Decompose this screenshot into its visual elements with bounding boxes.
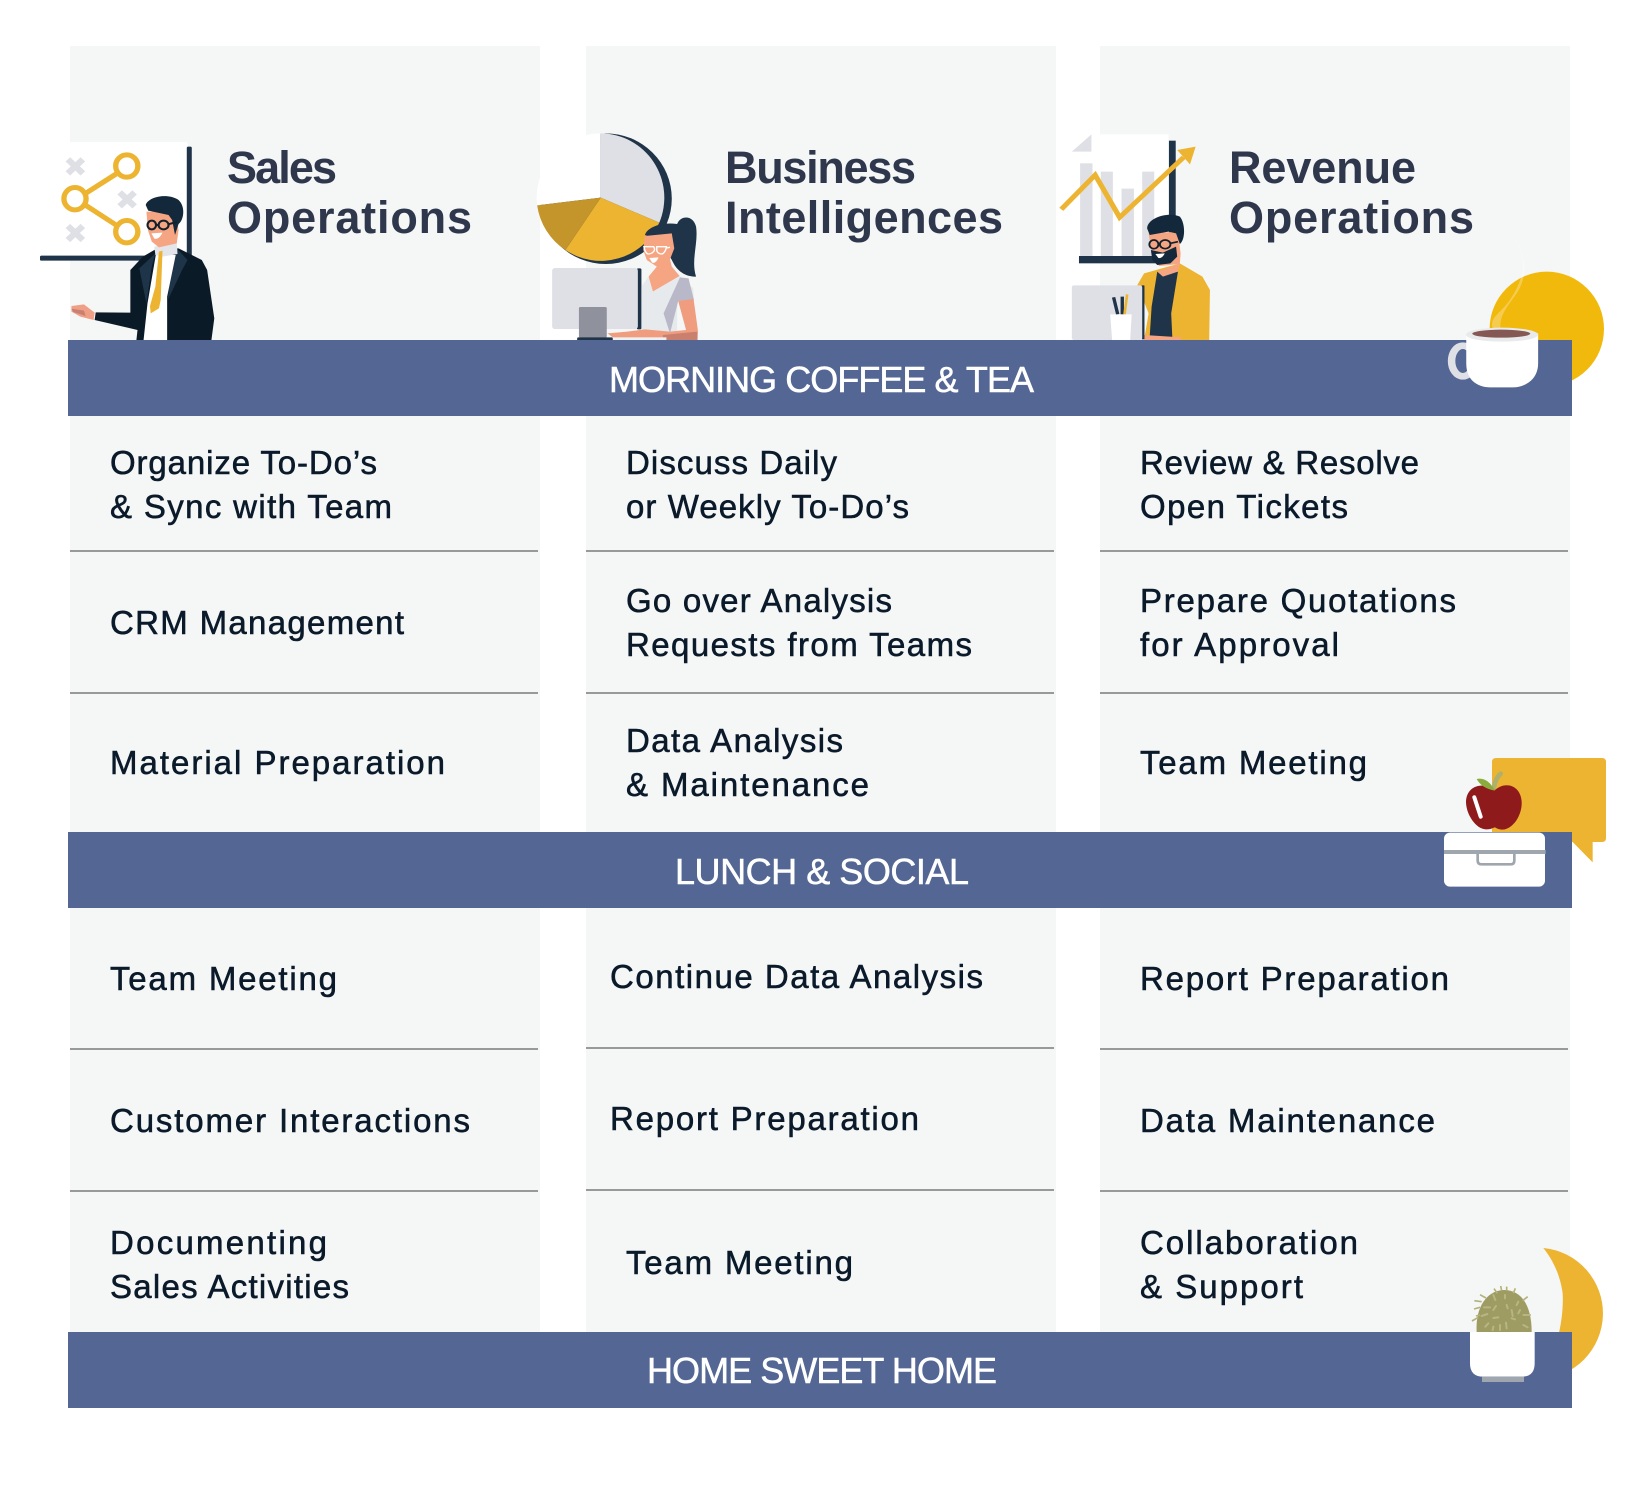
- analyst figure: [607, 218, 698, 341]
- heading: sales operations: Operations: [227, 192, 472, 243]
- task list: revenue operations, afternoon: Data Maintenance: [1140, 1102, 1435, 1139]
- pie chart: [537, 133, 672, 264]
- task list: revenue operations, morning: for Approval: [1140, 626, 1339, 663]
- heading: sales operations: [227, 142, 472, 243]
- illustration: salesman presenting at a board: [40, 142, 214, 340]
- icon: potted cactus: [1470, 1286, 1535, 1382]
- task list: business intelligences, morning: Go over Analysis: [626, 582, 892, 619]
- salesman figure: [71, 196, 214, 340]
- task list: business intelligences, morning: Data Analysis: [626, 722, 843, 759]
- monitor: [552, 268, 641, 341]
- task list: revenue operations, afternoon: Collaboration: [1140, 1224, 1358, 1261]
- task list: business intelligences, afternoon: Report Preparation: [610, 1100, 919, 1137]
- illustration: revenue analyst with growth chart: [1061, 134, 1210, 340]
- task list: sales operations, morning: Material Preparation: [110, 744, 445, 781]
- task list: business intelligences, afternoon: Team Meeting: [626, 1244, 853, 1281]
- illustration: analyst at computer with pie chart: [537, 133, 698, 341]
- heading: business intelligences: Business: [725, 142, 916, 193]
- band: home sweet home: [68, 1332, 1572, 1408]
- heading: revenue operations: Revenue: [1229, 142, 1416, 193]
- task list: sales operations, afternoon: Team Meeting: [110, 960, 337, 997]
- revenue analyst figure: [1137, 215, 1210, 340]
- board: [40, 142, 192, 261]
- heading: revenue operations: [1229, 142, 1474, 243]
- task list: revenue operations, afternoon: Report Preparation: [1140, 960, 1449, 997]
- task list: revenue operations, morning: [1140, 444, 1456, 781]
- task list: business intelligences, afternoon: Continue Data Analysis: [610, 958, 983, 995]
- icon: speech bubble behind the lunch box: [1492, 758, 1606, 862]
- panel: revenue operations column: [1100, 46, 1570, 1336]
- band: lunch and social: [68, 832, 1572, 908]
- band: home sweet home: HOME SWEET HOME: [647, 1350, 997, 1391]
- task list: sales operations, afternoon: Sales Activities: [110, 1268, 349, 1305]
- band: morning coffee and tea: MORNING COFFEE & TEA: [609, 359, 1034, 400]
- heading: sales operations: Sales: [227, 142, 337, 193]
- task list: sales operations, afternoon: [110, 960, 470, 1305]
- panel: business intelligences column: [586, 46, 1056, 1336]
- task list: business intelligences, afternoon: [610, 958, 983, 1281]
- task list: revenue operations, afternoon: [1140, 960, 1449, 1305]
- task list: sales operations, afternoon: Customer Interactions: [110, 1102, 470, 1139]
- task list: business intelligences, morning: & Maintenance: [626, 766, 869, 803]
- task list: revenue operations, morning: Prepare Quotations: [1140, 582, 1456, 619]
- divider rules: [70, 550, 1568, 1192]
- task list: sales operations, morning: CRM Management: [110, 604, 404, 641]
- task list: sales operations, morning: & Sync with Team: [110, 488, 392, 525]
- heading: revenue operations: Operations: [1229, 192, 1474, 243]
- band: morning coffee and tea: [68, 340, 1572, 416]
- task list: business intelligences, morning: or Weekly To-Do’s: [626, 488, 909, 525]
- heading: business intelligences: [725, 142, 1003, 243]
- panel: sales operations column: [70, 46, 540, 1336]
- icon: crescent moon behind the plant: [1540, 1248, 1603, 1379]
- task list: revenue operations, morning: Open Tickets: [1140, 488, 1348, 525]
- task list: revenue operations, morning: Review & Resolve: [1140, 444, 1419, 481]
- icon: apple on a lunch box: [1444, 774, 1546, 887]
- heading: business intelligences: Intelligences: [725, 192, 1003, 243]
- band: lunch and social: LUNCH & SOCIAL: [675, 851, 969, 892]
- growth chart: [1061, 134, 1196, 263]
- task list: revenue operations, afternoon: & Support: [1140, 1268, 1303, 1305]
- task list: sales operations, morning: Organize To-Do’s: [110, 444, 377, 481]
- task list: business intelligences, morning: Requests from Teams: [626, 626, 972, 663]
- task list: business intelligences, morning: Discuss Daily: [626, 444, 838, 481]
- task list: revenue operations, morning: Team Meeting: [1140, 744, 1367, 781]
- task list: sales operations, morning: [110, 444, 445, 781]
- icon: coffee cup with steam: [1452, 230, 1538, 387]
- task list: sales operations, afternoon: Documenting: [110, 1224, 327, 1261]
- icon: yellow sun behind the coffee: [1490, 272, 1604, 386]
- laptop and pen cup: [1072, 285, 1144, 340]
- task list: business intelligences, morning: [626, 444, 972, 803]
